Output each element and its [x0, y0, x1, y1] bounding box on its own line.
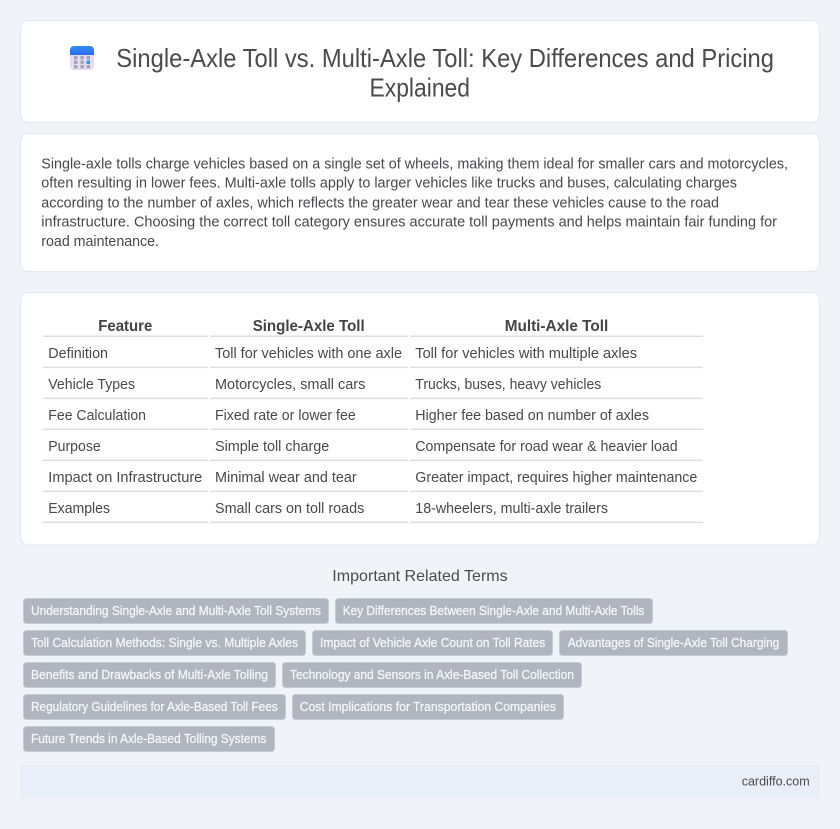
text block: summary: often resulting in lower fees. Multi-axle tolls apply to larger vehicles like trucks and buses, calculating charges	[41, 176, 737, 192]
panel: title card	[20, 20, 820, 122]
chip	[24, 694, 286, 720]
row: definition: Toll for vehicles with one axle	[215, 346, 402, 362]
row: fee calculation	[48, 408, 649, 424]
row: examples: 18-wheelers, multi-axle trailers	[415, 501, 608, 517]
title	[116, 45, 774, 102]
row: vehicle types	[48, 377, 601, 393]
panel: summary card	[20, 134, 820, 272]
row: impact on infrastructure: Minimal wear and tear	[215, 470, 357, 486]
chip: Impact of Vehicle Axle Count on Toll Rates	[320, 635, 545, 650]
chip: Key Differences Between Single-Axle and Multi-Axle Tolls	[343, 603, 644, 618]
row: purpose: Compensate for road wear & heavier load	[415, 439, 678, 455]
row: vehicle types: Motorcycles, small cars	[215, 377, 365, 393]
table header: Multi-Axle Toll	[505, 318, 608, 335]
row: purpose	[48, 439, 678, 455]
title: Single-Axle Toll vs. Multi-Axle Toll: Key Differences and Pricing	[116, 45, 774, 73]
row: impact on infrastructure: Impact on Infrastructure	[48, 470, 202, 486]
text block: summary	[41, 156, 788, 250]
row: impact on infrastructure: Greater impact, requires higher maintenance	[415, 470, 697, 486]
row: examples	[48, 501, 608, 517]
chip: Advantages of Single-Axle Toll Charging	[568, 635, 779, 650]
row: examples: Small cars on toll roads	[215, 501, 364, 517]
chip	[336, 598, 652, 624]
chip	[24, 726, 274, 752]
text block: summary: according to the number of axles, which reflects the greater wear and tear these vehicles cause to the road	[41, 195, 719, 211]
row: definition	[48, 346, 637, 362]
chip	[292, 694, 564, 720]
text block: summary: infrastructure. Choosing the correct toll category ensures accurate toll payments and helps maintain fair funding for	[41, 214, 777, 230]
row: vehicle types: Vehicle Types	[48, 377, 135, 393]
row: definition: Toll for vehicles with multiple axles	[415, 346, 637, 362]
row: examples: Examples	[48, 501, 110, 517]
row: impact on infrastructure	[48, 470, 697, 486]
chip	[24, 598, 328, 624]
row: fee calculation: Fixed rate or lower fee	[215, 408, 356, 424]
footer: cardiffo.com	[742, 774, 810, 789]
chip	[24, 662, 276, 688]
panel: related term chips	[24, 598, 788, 752]
chip: Understanding Single-Axle and Multi-Axle Toll Systems	[31, 603, 321, 618]
table header: Feature	[98, 318, 153, 335]
panel: comparison table	[20, 292, 820, 545]
row: fee calculation: Fee Calculation	[48, 408, 146, 424]
table header: Single-Axle Toll	[253, 318, 365, 335]
footer	[20, 765, 820, 798]
row: definition: Definition	[48, 346, 108, 362]
table header	[98, 318, 608, 335]
chip: Toll Calculation Methods: Single vs. Multiple Axles	[31, 635, 298, 650]
row: fee calculation: Higher fee based on number of axles	[415, 408, 649, 424]
chip: Technology and Sensors in Axle-Based Toll Collection	[290, 667, 574, 682]
chip	[24, 630, 306, 656]
text block: summary: Single-axle tolls charge vehicles based on a single set of wheels, making them ideal for smaller cars and motorcycles,	[41, 156, 788, 172]
row: purpose: Simple toll charge	[215, 439, 329, 455]
row: vehicle types: Trucks, buses, heavy vehicles	[415, 377, 601, 393]
chip	[282, 662, 582, 688]
heading: related terms: Important Related Terms	[332, 568, 508, 585]
chip: Cost Implications for Transportation Companies	[300, 699, 556, 714]
text block: summary: road maintenance.	[41, 234, 159, 250]
icon: calendar	[70, 46, 94, 70]
title: Explained	[370, 74, 470, 102]
row: purpose: Purpose	[48, 439, 101, 455]
chip: Future Trends in Axle-Based Tolling Systems	[31, 731, 266, 746]
chip	[312, 630, 552, 656]
chip	[560, 630, 788, 656]
chip: Benefits and Drawbacks of Multi-Axle Tolling	[31, 667, 268, 682]
chip: Regulatory Guidelines for Axle-Based Toll Fees	[31, 699, 278, 714]
